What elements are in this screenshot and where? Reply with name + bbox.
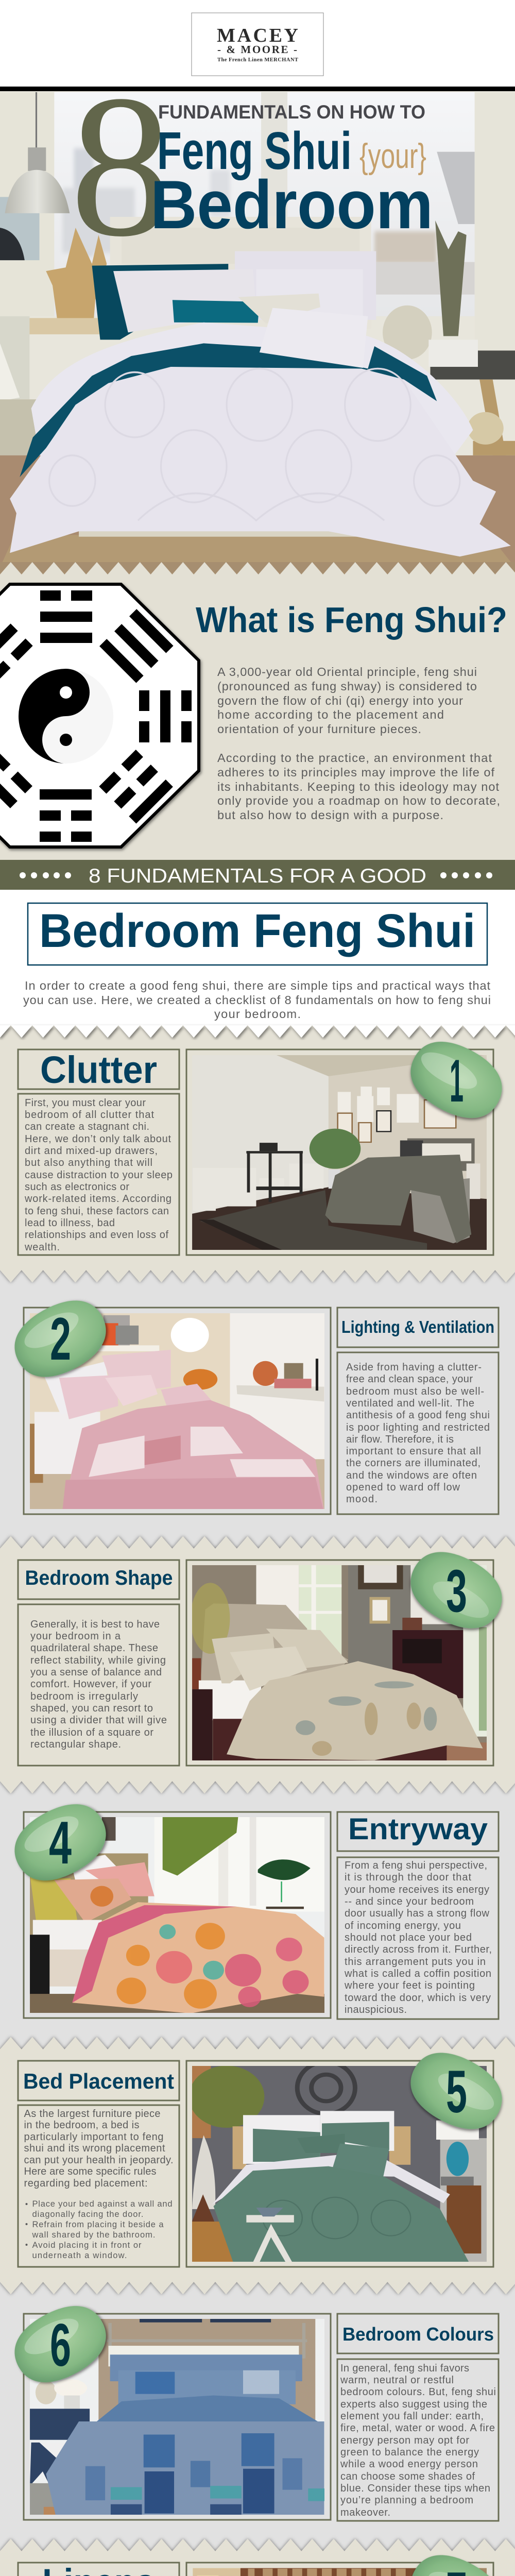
title line: Bedroom: Bedroom	[150, 167, 433, 243]
bullet list: Refrain from placing it beside a	[32, 2220, 164, 2229]
grey background for even sections	[0, 1267, 515, 2576]
stone 4: 4	[49, 1809, 72, 1876]
text box: comfort. However, if your	[30, 1679, 151, 1690]
bullet list: Avoid placing it in front or	[32, 2241, 142, 2250]
text box: fire, metal, water or wood. A fire	[340, 2422, 495, 2434]
text block: definition: A 3,000-year old Oriental principle, feng shui	[217, 665, 477, 679]
text box: it is through the door that	[345, 1872, 471, 1883]
bullet list: Place your bed against a wall and	[32, 2199, 172, 2209]
logo: Macey & Moore: - & MOORE -	[217, 43, 297, 56]
intro text: you can use. Here, we created a checklist of 8 fundamentals on how to feng shui	[23, 993, 491, 1007]
text box with rules: can put your health in jeopardy.	[24, 2155, 173, 2166]
bullet list: underneath a window.	[32, 2251, 127, 2260]
photo: cream quilt	[186, 2563, 493, 2576]
bullet list: wall shared by the bathroom.	[32, 2230, 156, 2240]
text box: your bedroom in a	[30, 1631, 121, 1642]
text box with rules: in the bedroom, a bed is	[24, 2120, 139, 2131]
section 6: bedroom colours	[24, 2314, 499, 2521]
stone 6: 6	[50, 2311, 71, 2379]
intro text	[23, 979, 491, 1021]
photo: cluttered bedroom	[186, 1049, 493, 1255]
text box	[337, 1352, 499, 1514]
text box: your home receives its energy	[345, 1884, 489, 1895]
text box: blue. Consider these tips when	[340, 2483, 490, 2494]
text box: of incoming energy, you	[345, 1920, 461, 1931]
text box: the illusion of a square or	[30, 1727, 153, 1738]
photo: bird print quilt	[186, 1560, 493, 1766]
logo: Macey & Moore	[192, 13, 323, 76]
text box: makeover.	[340, 2507, 390, 2518]
text box: bedroom is irregularly	[30, 1691, 138, 1702]
text box: green to balance the energy	[340, 2447, 479, 2458]
title box: Bedroom Colours	[342, 2324, 494, 2345]
text box: while a wood energy person	[340, 2459, 478, 2470]
text box: Generally, it is best to have	[30, 1619, 160, 1630]
text box: bedroom of all clutter that	[25, 1109, 154, 1121]
title box	[18, 2061, 179, 2100]
text box: ventilated and well-lit. The	[346, 1398, 474, 1409]
photo: pink quilt	[24, 1308, 331, 1514]
text box: air flow. Therefore, it is	[346, 1434, 454, 1445]
text box	[18, 1094, 179, 1255]
text box: inauspicious.	[345, 2004, 407, 2015]
text box with rules: Here are some specific rules	[24, 2166, 157, 2177]
text box: rectangular shape.	[30, 1739, 121, 1750]
text box: should not place your bed	[345, 1932, 472, 1943]
text box: what is called a coffin position	[344, 1968, 491, 1979]
text box: opened to ward off low	[346, 1482, 460, 1493]
text box: mood.	[346, 1494, 377, 1505]
title box: Clutter	[40, 1048, 157, 1091]
banner: 8 fundamentals for a good: 8 FUNDAMENTALS FOR A GOOD	[89, 865, 426, 887]
text block: definition: (pronounced as fung shway) is considered to	[217, 680, 477, 693]
heading box: bedroom feng shui: Bedroom Feng Shui	[39, 905, 475, 957]
title accent: your: {your}	[359, 137, 426, 176]
text block: definition: orientation of your furniture pieces.	[217, 722, 421, 736]
text box: and the windows are often	[346, 1470, 477, 1481]
title box	[18, 1560, 179, 1599]
text box: In general, feng shui favors	[340, 2363, 469, 2374]
text box	[18, 1604, 179, 1766]
title box	[337, 1308, 499, 1347]
text box: toward the door, which is very	[345, 1992, 491, 2004]
stone 3	[399, 1539, 513, 1641]
text box: such as electronics or	[25, 1181, 129, 1193]
text box with rules: As the largest furniture piece	[24, 2108, 161, 2120]
hero title	[70, 54, 433, 279]
title line: fundamentals on how to: FUNDAMENTALS ON HOW TO	[158, 101, 425, 123]
text box	[337, 1857, 499, 2019]
text box: experts also suggest using the	[340, 2399, 487, 2410]
text box: door usually has a strong flow	[345, 1908, 490, 1919]
text box: to feng shui, these factors can	[25, 1206, 169, 1217]
title box: Entryway	[348, 1812, 488, 1846]
text box with rules: shui and its wrong placement	[24, 2143, 165, 2154]
big numeral 8: 8	[70, 54, 172, 279]
text box: you’re planning a bedroom	[340, 2495, 473, 2506]
text box: element you fall under: earth,	[340, 2411, 484, 2422]
title box: Bedroom Shape	[25, 1567, 173, 1589]
text block: definition: its inhabitants. Keeping to this ideology may not	[217, 780, 499, 793]
text box: important to ensure that all	[346, 1446, 481, 1457]
text box: work-related items. According	[24, 1193, 171, 1205]
text box	[337, 2359, 499, 2521]
icon: bagua mirror	[0, 584, 199, 847]
hero bedroom photo	[0, 90, 515, 567]
text box: antithesis of a good feng shui	[346, 1410, 490, 1421]
text box: this arrangement puts you in	[345, 1956, 486, 1968]
section: what is feng shui	[0, 562, 515, 860]
stone 2: 2	[50, 1305, 71, 1372]
text box: directly across from it. Further,	[345, 1944, 492, 1955]
text box: First, you must clear your	[25, 1097, 146, 1109]
photo: green quilt	[186, 2061, 493, 2267]
text box: Aside from having a clutter-	[346, 1362, 482, 1373]
text box: quadrilateral shape. These	[30, 1642, 158, 1654]
stone 2	[3, 1287, 117, 1390]
stone 5	[399, 2040, 513, 2142]
text box: is poor lighting and restricted	[346, 1422, 490, 1433]
text box: where your feet is pointing	[344, 1980, 475, 1991]
text block: definition: adheres to its principles may improve the life of	[217, 766, 494, 779]
text block: definition	[217, 665, 500, 822]
text block: definition: According to the practice, an environment that	[217, 751, 492, 765]
text box: bedroom colours. But, feng shui	[340, 2386, 496, 2398]
stone 6	[3, 2293, 117, 2396]
stone 1: 1	[450, 1047, 464, 1114]
photo: floral quilt	[24, 1812, 331, 2018]
text block: definition: only provide you a roadmap on how to decorate,	[217, 794, 500, 807]
text box with rules: regarding bed placement:	[24, 2178, 147, 2189]
bullet list: diagonally facing the door.	[32, 2210, 143, 2219]
text box: shaped, you can resort to	[30, 1703, 153, 1714]
text block: definition: home according to the placement and	[217, 708, 444, 721]
text box: -- and since your bedroom	[345, 1896, 474, 1907]
section 2: lighting and ventilation	[24, 1308, 499, 1514]
text box: warm, neutral or restful	[340, 2375, 454, 2386]
text box: cause distraction to your sleep	[25, 1170, 173, 1181]
photo: blue patchwork quilt	[24, 2314, 331, 2520]
title box: Bed Placement	[23, 2069, 174, 2093]
stone 1	[399, 1028, 513, 1131]
intro text: your bedroom.	[214, 1007, 301, 1021]
bullet list	[26, 2199, 172, 2260]
text box: bedroom must also be well-	[346, 1386, 484, 1397]
logo: Macey & Moore: MACEY	[217, 25, 298, 46]
text box: relationships and even loss of	[25, 1229, 168, 1241]
text box: using a divider that will give	[30, 1715, 167, 1726]
text box: energy person may opt for	[340, 2435, 469, 2446]
section 1: clutter	[0, 1025, 515, 1282]
text box: can choose some shades of	[340, 2471, 475, 2482]
section 7: linens	[0, 2539, 515, 2576]
stone 3: 3	[446, 1557, 467, 1624]
text box: free and clean space, your	[346, 1374, 473, 1385]
section 3: bedroom shape	[0, 1536, 515, 1793]
text box: can create a stagnant chi.	[25, 1121, 149, 1132]
banner: 8 fundamentals for a good	[0, 860, 515, 890]
section 4: entryway	[24, 1812, 499, 2019]
stone 4	[3, 1791, 117, 1894]
text box: dirt and mixed-up drawers,	[25, 1145, 158, 1157]
title line: Feng Shui: Feng Shui	[157, 121, 352, 180]
section 5: bed placement	[0, 2037, 515, 2294]
stone 5: 5	[446, 2058, 467, 2125]
text box: reflect stability, while giving	[30, 1655, 166, 1666]
text block: definition: but also how to design with a purpose.	[217, 808, 443, 822]
title box: Lighting & Ventilation	[341, 1317, 494, 1336]
text box with rules: particularly important to feng	[24, 2131, 164, 2143]
text box: lead to illness, bad	[25, 1217, 115, 1229]
title box	[337, 2314, 499, 2353]
text box: the corners are illuminated,	[346, 1458, 480, 1469]
stone 7	[399, 2542, 513, 2576]
text box: wealth.	[24, 1242, 60, 1253]
text box with rules	[18, 2105, 179, 2267]
header rule	[0, 87, 515, 91]
text box: Here, we don’t only talk about	[25, 1133, 171, 1145]
text block: definition: govern the flow of chi (qi) energy into your	[217, 694, 463, 707]
text box: you a sense of balance and	[30, 1667, 162, 1678]
intro text: In order to create a good feng shui, there are simple tips and practical ways that	[25, 979, 490, 992]
stones: numbered badges	[3, 1028, 513, 2576]
logo: Macey & Moore: The French Linen MERCHANT	[217, 57, 298, 63]
text box: but also anything that will	[25, 1157, 152, 1168]
text box: From a feng shui perspective,	[345, 1860, 487, 1871]
